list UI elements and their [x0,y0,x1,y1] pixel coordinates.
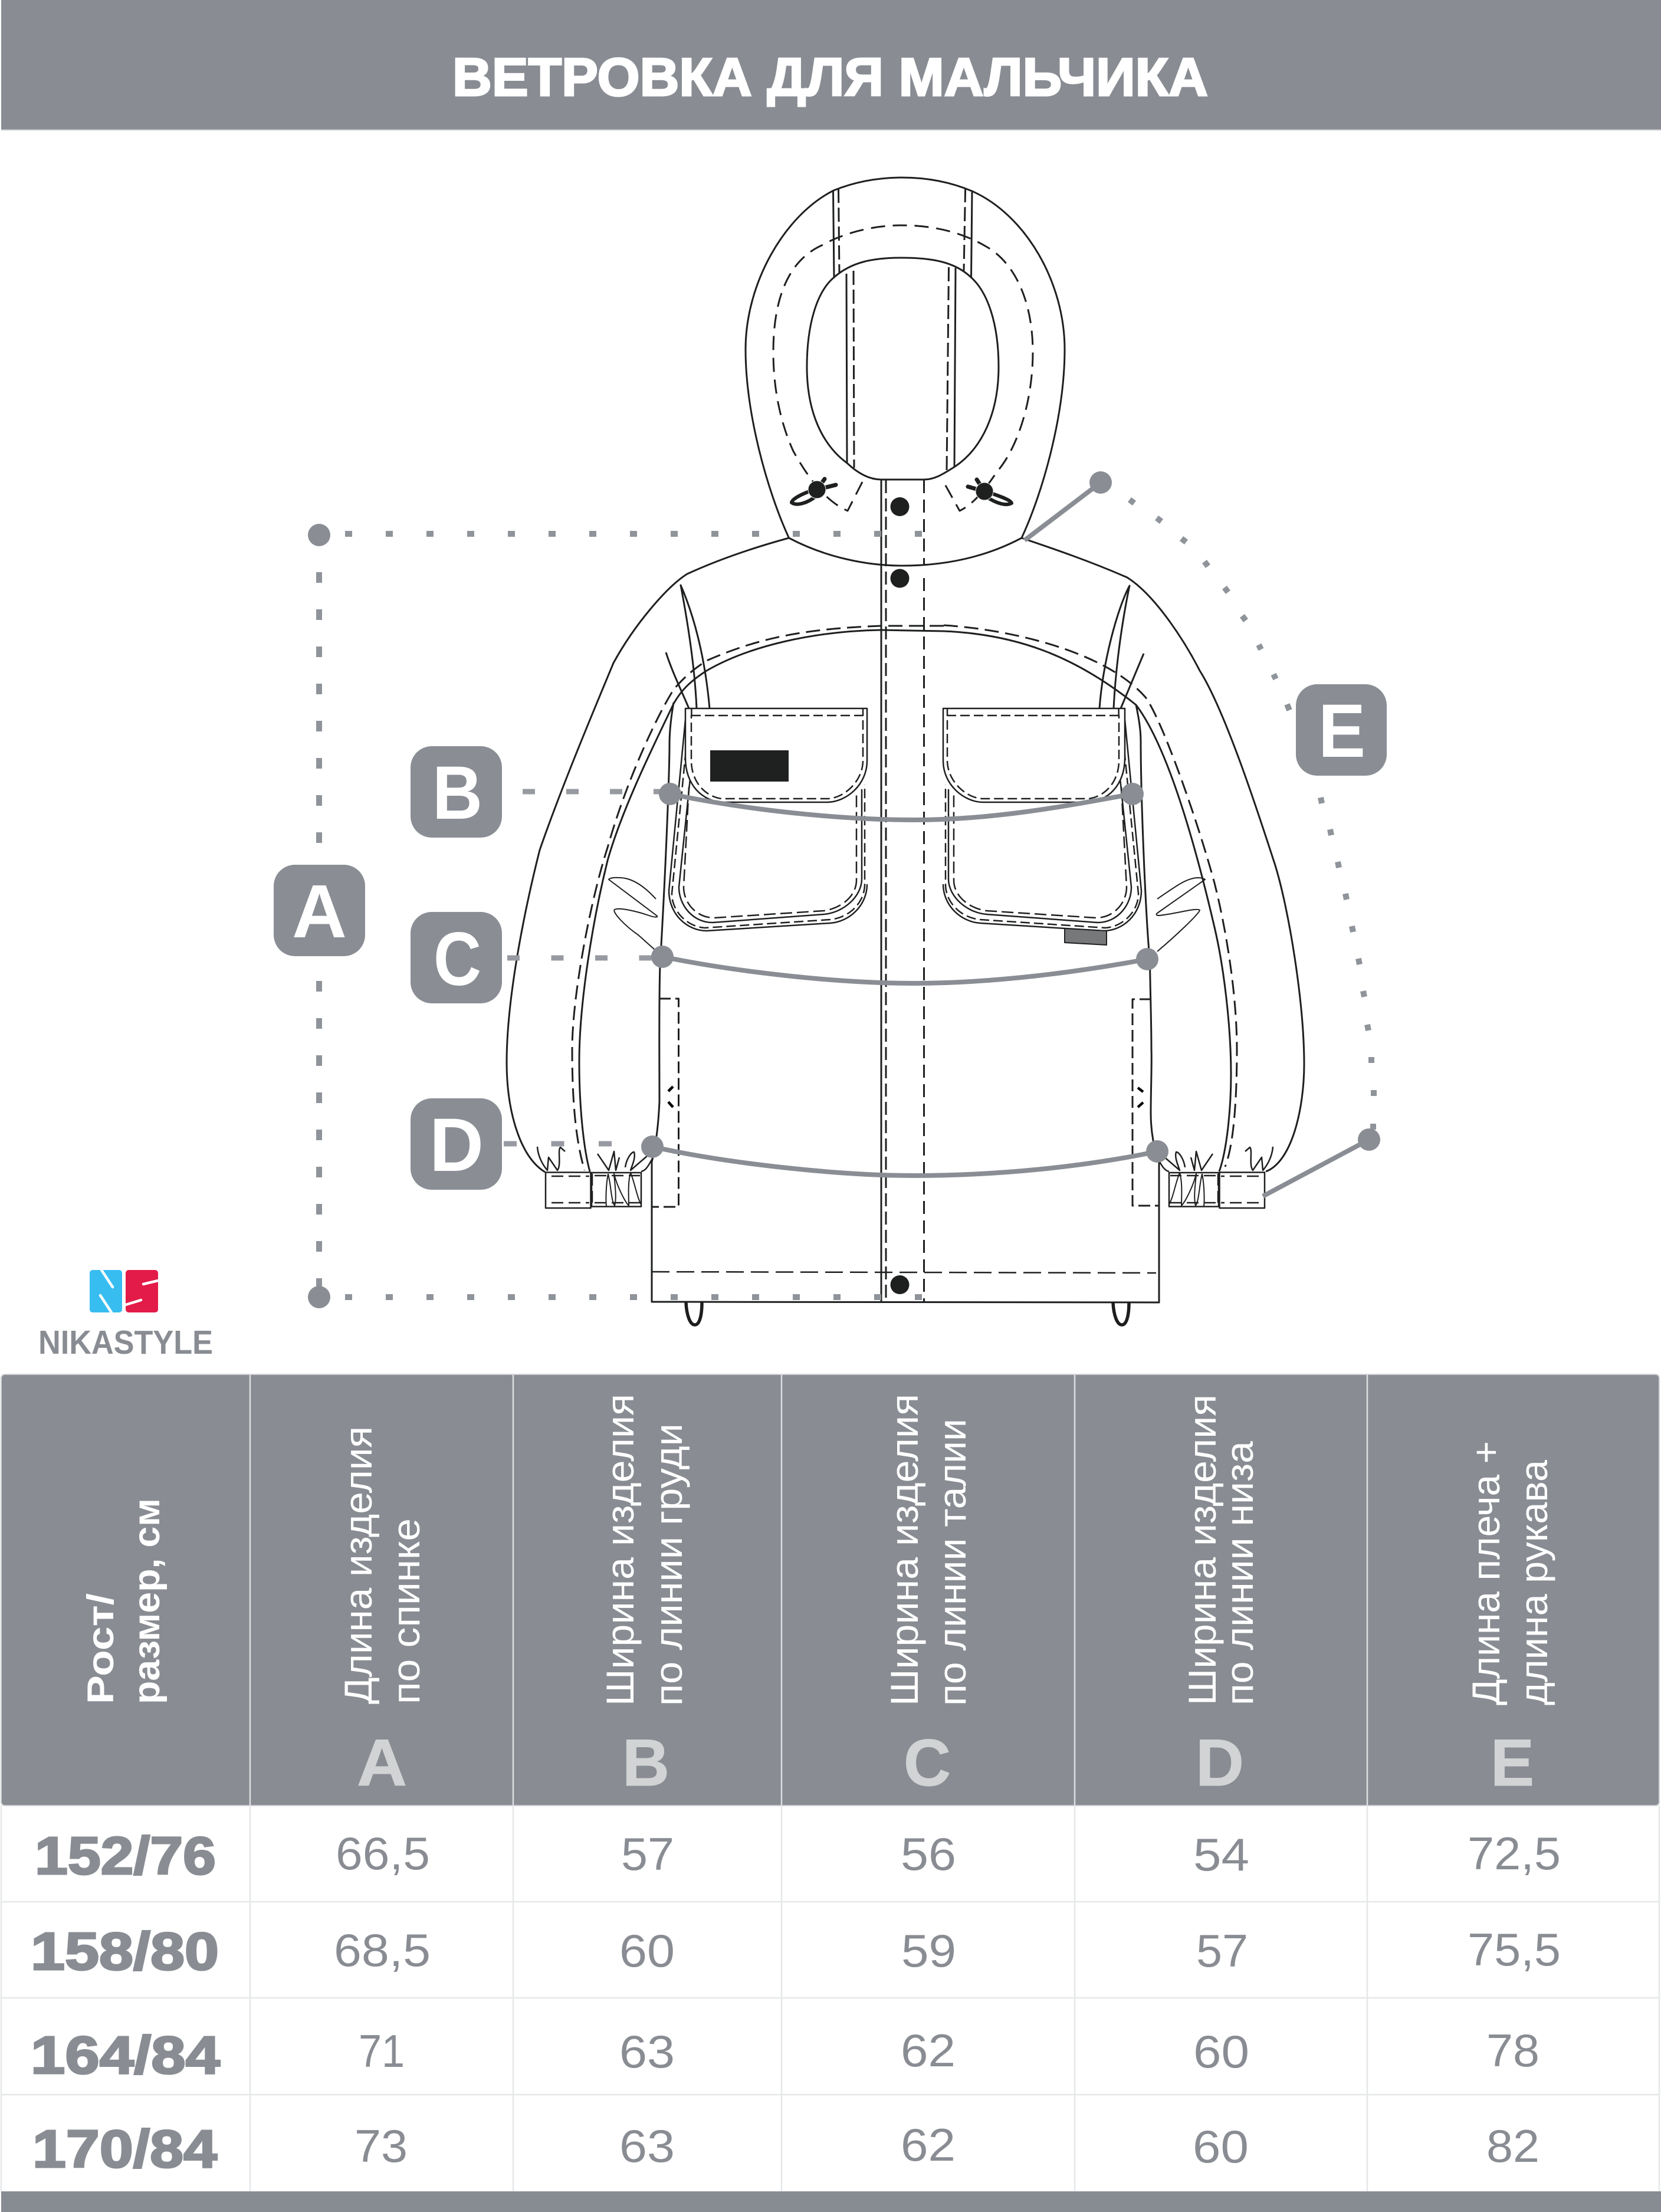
measurement C: waist width line [507,946,1158,983]
measurement D: hem width line [504,1135,1168,1176]
header: column C: Ширина изделия [882,1394,926,1706]
size labels: 170/84 [32,2120,217,2179]
bottom band [1,2191,1661,2212]
values: column A: 71 [359,2025,405,2077]
values: column B: 63 [619,2026,675,2078]
header: column B: Ширина изделия [598,1394,642,1706]
values: column D [1193,1829,1249,2172]
header: column C [882,1394,974,1800]
size labels: 152/76 [35,1827,216,1886]
badge B: B [432,751,482,835]
badge E [1296,684,1387,776]
values: column E: 82 [1486,2120,1539,2172]
sleeves and shoulders [507,538,1304,1172]
black chest label [710,750,789,782]
values: column A: 66,5 [336,1827,430,1879]
header: column A [336,1426,428,1800]
title: ВЕТРОВКА ДЛЯ МАЛЬЧИКА [452,48,1208,107]
shoulder and elbow wrinkles [609,585,1205,951]
values: column B: 63 [619,2120,675,2172]
badge D: D [429,1103,484,1187]
header: column E: Длина плеча + [1464,1441,1508,1705]
badge E: E [1318,689,1365,773]
header: column B: B [622,1726,669,1800]
values: column C: 62 [901,2024,956,2076]
title banner [1,0,1661,130]
header: column D: D [1196,1726,1244,1800]
measurement E: shoulder and sleeve dotted arc [1025,471,1380,1196]
badge C [411,912,502,1003]
badge C: C [434,917,481,1002]
values: column A [334,1827,431,2172]
values: column C: 62 [901,2119,956,2171]
jacket technical drawing [507,178,1304,1325]
grey pocket tag [1065,928,1107,945]
table grid lines [1,1806,1659,2191]
values: column C [901,1828,956,2171]
values: column D: 54 [1193,1829,1249,1880]
header: column D: по линии низа [1217,1441,1261,1705]
table header [1,1374,1659,1806]
header: size column: размер, см [126,1498,168,1704]
badge A: A [292,869,347,954]
values: column E [1468,1827,1561,2172]
hood [746,178,1065,566]
logo: NIKASTYLE [38,1270,213,1361]
measurement A: body length dotted bracket [308,524,922,1308]
header: column C: по линии талии [930,1419,974,1706]
values: column E: 75,5 [1468,1924,1561,1975]
badge D [411,1098,502,1190]
center placket and buttons [881,480,924,1302]
header: column E: E [1491,1726,1534,1800]
badge B [411,746,502,838]
header: column A: A [357,1726,407,1800]
icon: hem drawstrings [686,1302,1129,1325]
header: column A: по спинке [384,1518,428,1704]
lower side pockets [652,999,1159,1207]
header: column D [1180,1394,1261,1800]
header: column E: длина рукава [1512,1460,1555,1705]
values: column B: 57 [621,1828,674,1880]
values: column C: 56 [901,1828,956,1880]
header: column C: C [904,1726,951,1800]
size labels: 158/80 [31,1922,219,1981]
size table [1,1374,1659,2191]
values: column D: 60 [1193,2026,1249,2078]
values: column D: 57 [1196,1925,1248,1977]
right chest pocket [943,708,1141,931]
icon: buttons [891,497,910,1294]
right cuff [1158,1147,1273,1208]
values: column E: 78 [1486,2024,1539,2076]
icon: hood toggles [792,479,1012,504]
logo: NIKASTYLE: NIKASTYLE [38,1324,213,1361]
icon: NS logo squares [90,1270,158,1312]
header: column A: Длина изделия [336,1426,380,1704]
header: column D: Ширина изделия [1180,1394,1224,1705]
measurement B: chest width line [523,783,1144,820]
header: column B: по линии груди [646,1423,690,1706]
values: column B: 60 [619,1925,675,1977]
header: column E [1464,1441,1555,1800]
values: column A: 73 [354,2120,408,2172]
values: column E: 72,5 [1468,1827,1561,1879]
badge A [274,865,365,956]
header: column B [598,1394,690,1800]
left cuff [537,1147,652,1208]
left chest pocket [669,708,867,931]
body side seams and hem [652,703,1159,1302]
values: column A: 68,5 [334,1924,431,1976]
header: size column: Рост/ [80,1593,122,1704]
size labels: 164/84 [31,2026,220,2085]
values: column C: 59 [901,1925,956,1977]
header: size column [80,1498,168,1704]
values: column D: 60 [1193,2121,1249,2172]
size labels [31,1827,220,2179]
values: column B [619,1828,675,2172]
